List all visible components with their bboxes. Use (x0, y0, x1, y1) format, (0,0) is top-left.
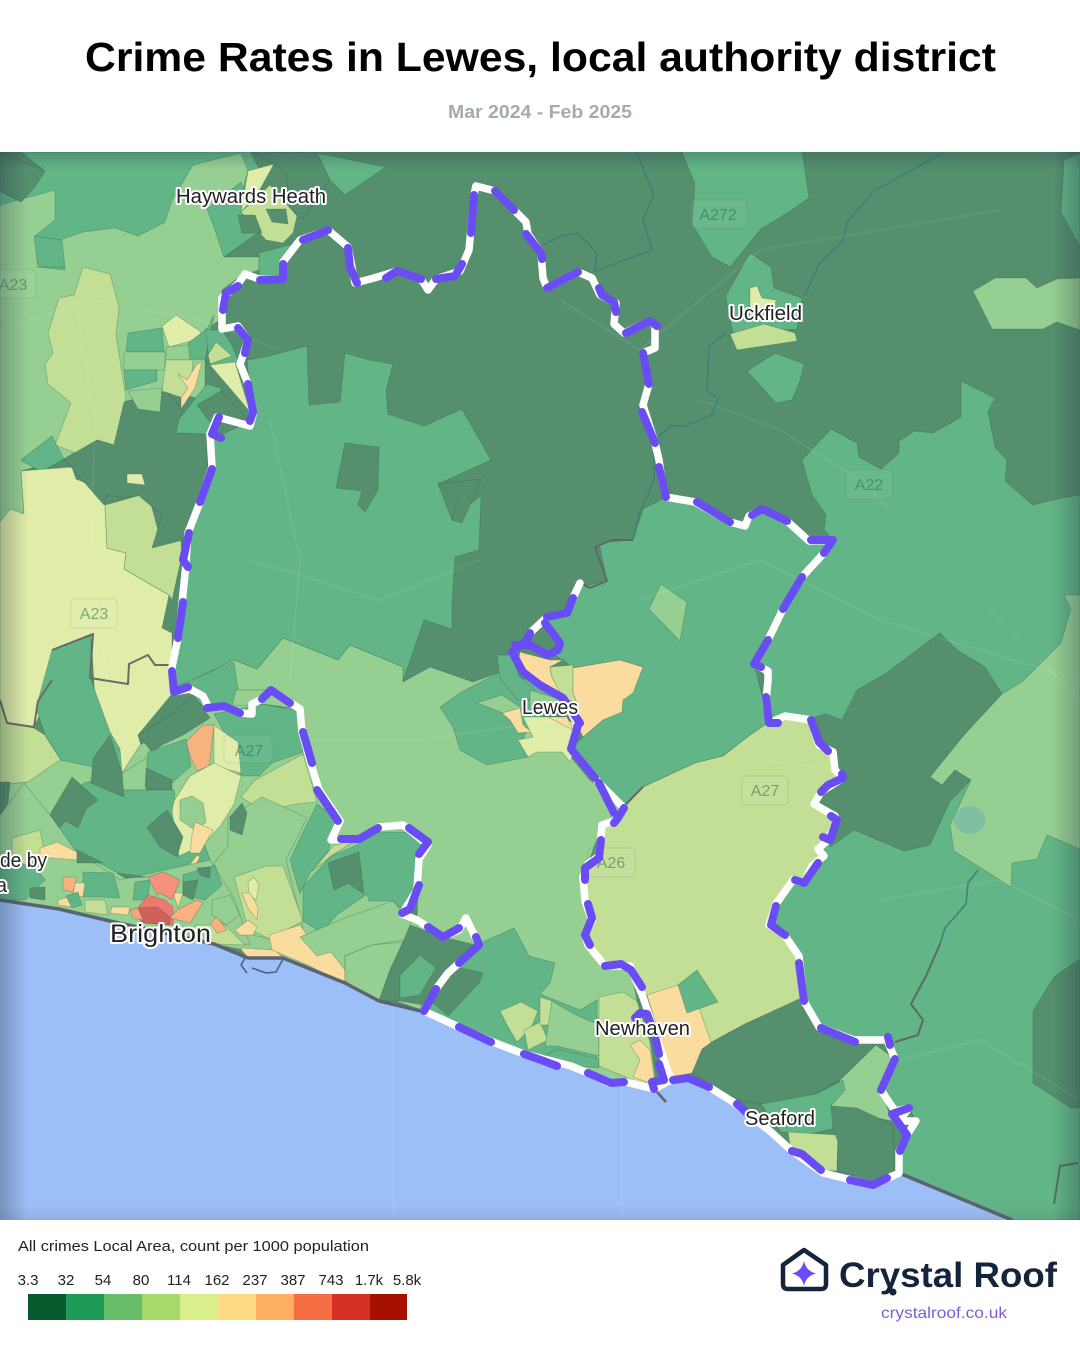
legend values: 743 (318, 1272, 344, 1289)
logo key dot (890, 1288, 896, 1296)
map regions: Lewes town (440, 497, 833, 808)
map regions: Brighton and coast strip (0, 782, 283, 958)
logo: Crystal Roof (783, 1250, 1057, 1322)
road shields: A26 (597, 855, 625, 872)
map regions: central downs and Brighton hinterland (0, 638, 640, 1090)
legend (18, 1238, 422, 1320)
sea tile seams (393, 1004, 622, 1220)
legend values: 32 (58, 1272, 74, 1289)
legend values: 80 (133, 1272, 149, 1289)
place labels: de by (0, 850, 47, 872)
district boundary (172, 186, 916, 1185)
road shields: A272 (699, 207, 737, 224)
road shields: A27 (235, 743, 263, 760)
legend values: 54 (95, 1272, 111, 1289)
place labels: Haywards Heath (176, 186, 326, 208)
legend values (18, 1272, 422, 1289)
map regions: district west and north (172, 346, 491, 690)
legend colour scale (28, 1294, 407, 1320)
road shields: A22 (855, 477, 883, 494)
road shields: A27 (751, 783, 779, 800)
place labels: Lewes (522, 697, 578, 719)
logo wordmark: Crystal Roof (839, 1256, 1057, 1295)
legend values: 237 (242, 1272, 268, 1289)
choropleth map (0, 150, 1080, 1220)
road shields (0, 200, 893, 877)
map regions: western countryside (0, 152, 386, 818)
map regions: south of district boundary (269, 832, 657, 1090)
legend values: 114 (167, 1272, 191, 1289)
place labels: Uckfield (729, 303, 802, 325)
road shields: A23 (80, 606, 108, 623)
lake (954, 806, 986, 834)
coastline (0, 900, 1012, 1220)
legend values: 5.8k (393, 1272, 422, 1289)
legend values: 3.3 (18, 1272, 38, 1289)
subtitle: date range: Mar 2024 - Feb 2025 (448, 102, 632, 122)
place labels: Seaford (745, 1108, 815, 1130)
edge shading (0, 152, 1080, 1220)
roads (0, 210, 1080, 1100)
legend title: All crimes Local Area, count per 1000 population (18, 1238, 369, 1255)
title: Crime Rates in Lewes, local authority district (85, 34, 996, 80)
sea (0, 900, 1012, 1220)
legend values: 162 (204, 1272, 230, 1289)
place labels: Newhaven (595, 1018, 690, 1040)
place labels: Brighton (110, 920, 211, 948)
rivers (0, 153, 1078, 1204)
place labels (0, 186, 815, 1130)
map regions: South Downs east of Lewes (583, 716, 895, 1182)
legend values: 1.7k (355, 1272, 384, 1289)
legend values: 387 (280, 1272, 306, 1289)
icon: house with star (783, 1250, 826, 1289)
map regions: eastern districts (681, 150, 1080, 1220)
website url: crystalroof.co.uk (881, 1305, 1008, 1322)
